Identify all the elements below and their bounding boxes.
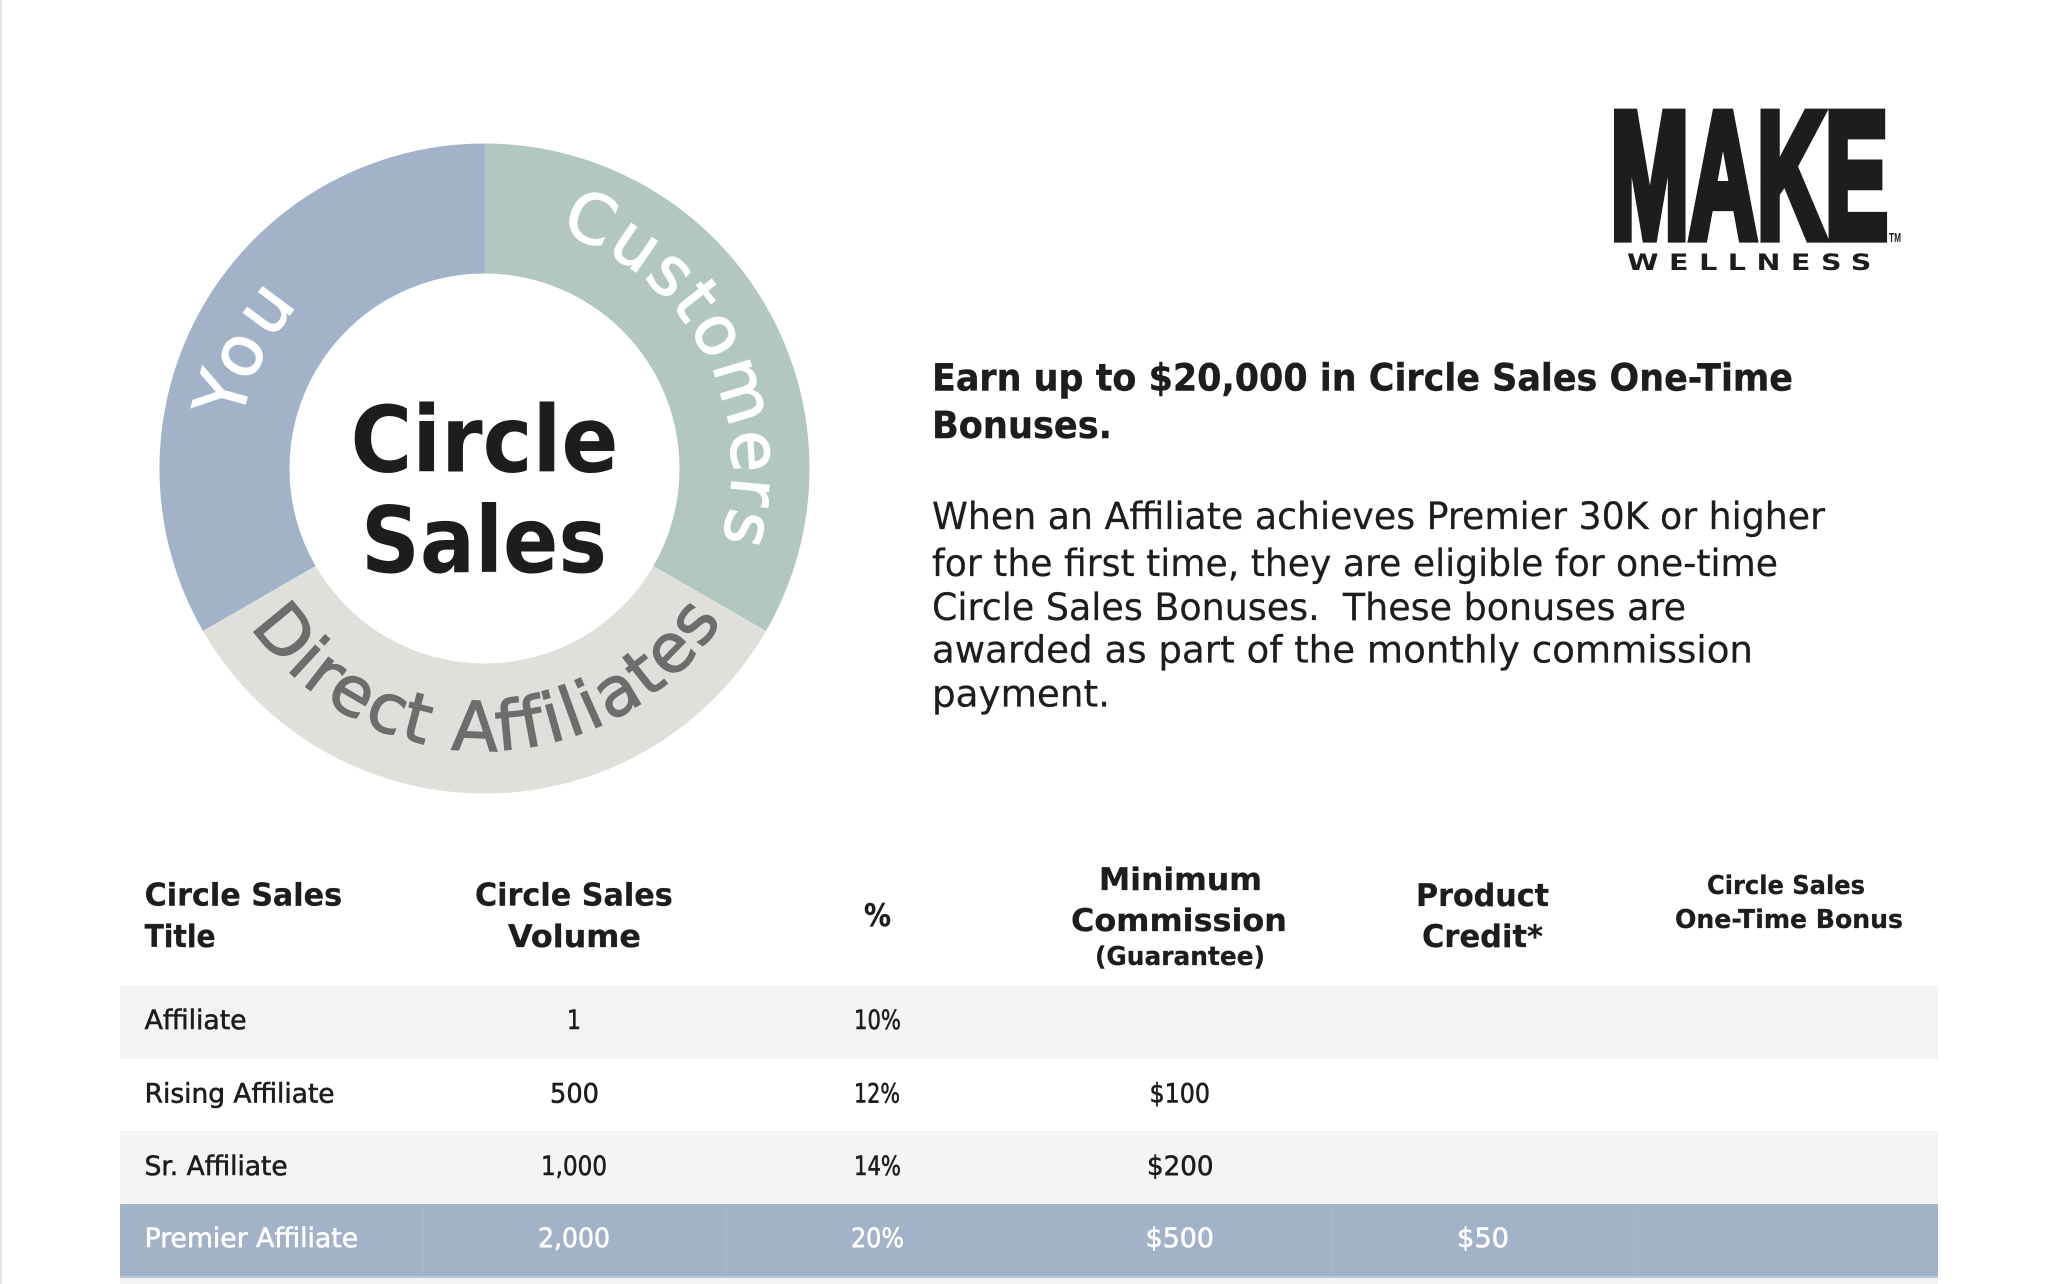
row: Premier Affiliate: 20%: [851, 1223, 904, 1254]
heading: Earn up to $20,000 in Circle Sales One-Time: [932, 356, 1793, 400]
donut chart: Circle Sales: [160, 144, 810, 794]
table header: Circle Sales: [145, 878, 342, 914]
label: You: You: [190, 286, 294, 409]
center title: Sales: [361, 487, 607, 594]
row: Rising Affiliate: Rising Affiliate: [145, 1079, 335, 1110]
trademark: TM: [1889, 231, 1901, 245]
intro text: [932, 356, 1826, 716]
center title: Circle: [350, 387, 618, 494]
center title: [350, 387, 618, 594]
segment: You: [159, 143, 484, 631]
row: Sr. Affiliate: [120, 1131, 1938, 1204]
segment: Customers: [484, 143, 810, 631]
label: Customers: Customers: [569, 192, 770, 545]
table header: [145, 862, 1903, 972]
next row (cropped): [120, 1278, 1938, 1284]
row: Affiliate: [120, 986, 1938, 1059]
heading: Bonuses.: [932, 403, 1112, 447]
logo: MAKE Wellness: [1610, 76, 1901, 276]
table header: %: [864, 898, 891, 934]
body paragraph: for the first time, they are eligible for one-time: [932, 541, 1778, 585]
row: Sr. Affiliate: Sr. Affiliate: [145, 1151, 288, 1182]
row: Sr. Affiliate: 14%: [854, 1151, 901, 1182]
logo subline: WELLNESS: [1627, 250, 1871, 276]
body paragraph: payment.: [932, 672, 1110, 716]
table header: Credit*: [1422, 919, 1543, 955]
body paragraph: [932, 494, 1826, 716]
commission table: [120, 862, 1938, 1284]
row: Affiliate: 1: [567, 1005, 581, 1036]
heading: [932, 356, 1793, 447]
body paragraph: When an Affiliate achieves Premier 30K or higher: [932, 494, 1826, 538]
logo wordmark: MAKE: [1610, 76, 1888, 276]
row: Affiliate: 10%: [854, 1005, 901, 1036]
table header: Circle Sales: [1707, 871, 1865, 901]
table header: Product: [1416, 878, 1549, 914]
row: Premier Affiliate: [120, 1204, 1938, 1278]
row: Rising Affiliate: $100: [1150, 1079, 1210, 1110]
table header: Circle Sales: [475, 878, 673, 914]
label: Direct Affiliates: Direct Affiliates: [253, 600, 718, 752]
row: Premier Affiliate: $500: [1146, 1223, 1214, 1254]
segment: Direct Affiliates: [203, 566, 766, 794]
body paragraph: Circle Sales Bonuses. These bonuses are: [932, 585, 1686, 629]
row: Premier Affiliate: $50: [1457, 1223, 1509, 1254]
row: Sr. Affiliate: 1,000: [541, 1151, 607, 1182]
table header: (Guarantee): [1095, 942, 1265, 972]
table header: Title: [145, 919, 216, 955]
row: Rising Affiliate: [145, 1079, 1210, 1110]
row: Rising Affiliate: 500: [550, 1079, 599, 1110]
row: Premier Affiliate: Premier Affiliate: [145, 1223, 358, 1254]
table header: Volume: [508, 919, 641, 955]
table header: Commission: [1071, 903, 1287, 939]
row: Rising Affiliate: 12%: [854, 1079, 900, 1110]
table header: One-Time Bonus: [1675, 905, 1903, 935]
body paragraph: awarded as part of the monthly commission: [932, 628, 1753, 672]
row: Affiliate: Affiliate: [145, 1005, 247, 1036]
row: Sr. Affiliate: $200: [1147, 1151, 1214, 1182]
row: Premier Affiliate: 2,000: [538, 1223, 610, 1254]
table header: Minimum: [1099, 862, 1262, 898]
